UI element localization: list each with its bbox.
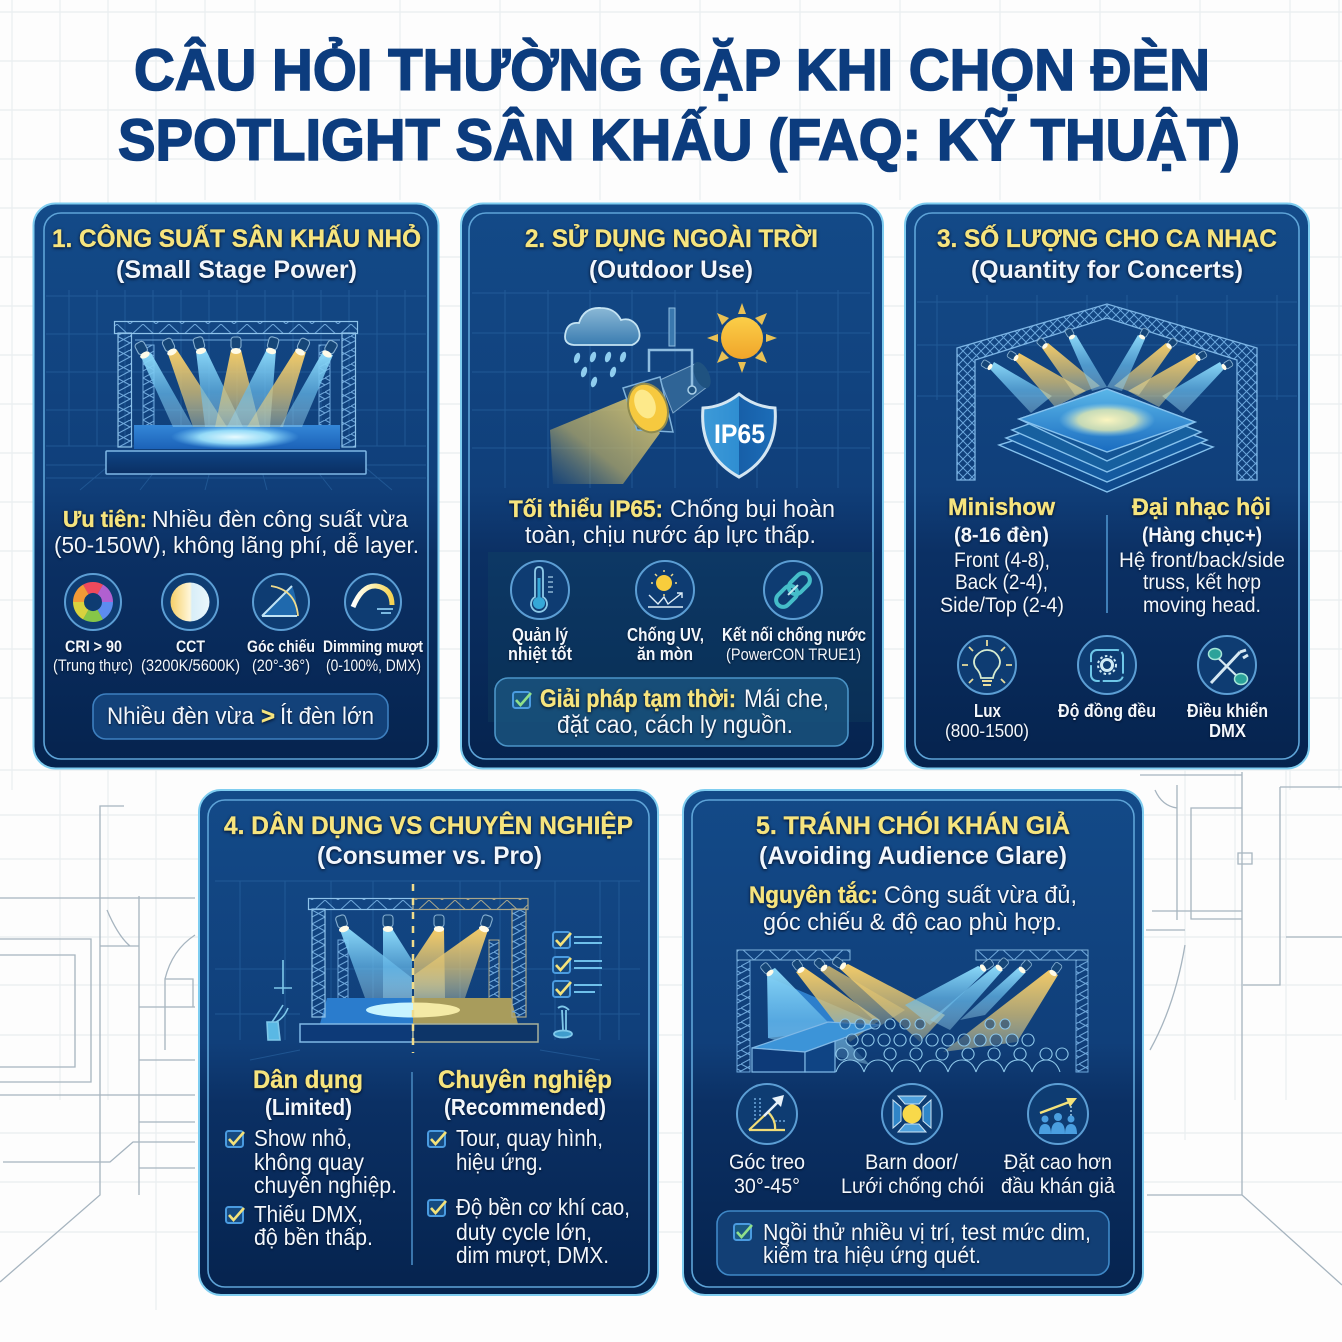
professional column: duty cycle lớn, <box>456 1219 592 1245</box>
callout: test tip: kiểm tra hiệu ứng quét. <box>763 1242 981 1268</box>
consumer column <box>226 1066 397 1250</box>
feature labels: Lưới chống chói <box>841 1175 984 1198</box>
stepped stage <box>999 389 1213 492</box>
feature labels: Kết nối chống nước <box>722 625 866 645</box>
panel: 4 consumer vs pro <box>199 790 658 1295</box>
feature labels: DMX <box>1209 721 1246 741</box>
panel 1 heading <box>52 223 421 284</box>
title <box>118 38 1240 173</box>
feature labels: (20°-36°) <box>252 656 310 675</box>
icon: rain cloud <box>565 308 640 388</box>
icon: waterproof connector <box>764 561 822 619</box>
festival column: truss, kết hợp <box>1143 571 1261 594</box>
minishow column: (8-16 đèn) <box>954 524 1049 547</box>
light beam <box>550 397 660 484</box>
icon: weak stand <box>267 960 292 1040</box>
panel: 2 outdoor use <box>461 204 883 768</box>
IP65 requirement text <box>509 496 835 549</box>
icon: hanging angle <box>737 1084 797 1144</box>
priority text: Ưu tiên: <box>63 506 147 532</box>
icon: thermometer <box>511 561 569 619</box>
centre dashed divider <box>412 884 414 1053</box>
panel 5 heading: (Avoiding Audience Glare) <box>759 842 1067 870</box>
split stage illustration <box>215 881 640 1060</box>
panel 1 heading: 1. CÔNG SUẤT SÂN KHẤU NHỎ <box>52 223 421 253</box>
audience <box>836 1019 1068 1072</box>
feature labels: Dimming mượt <box>323 637 423 656</box>
feature labels <box>53 637 423 675</box>
icon: barn door <box>882 1084 942 1144</box>
festival column: (Hàng chục+) <box>1142 524 1262 547</box>
panel: 1 small stage power <box>34 204 438 768</box>
panel 3 heading: (Quantity for Concerts) <box>971 256 1243 284</box>
IP65 requirement text: Tối thiểu IP65: <box>509 496 663 523</box>
minishow column: Front (4-8), <box>954 549 1050 572</box>
consumer column: (Limited) <box>265 1094 352 1120</box>
panel 3 heading <box>937 223 1277 284</box>
professional column: Chuyên nghiệp <box>438 1066 612 1094</box>
takeaway button: > <box>261 703 275 730</box>
professional column: hiệu ứng. <box>456 1149 543 1175</box>
takeaway button: Nhiều đèn vừa <box>107 703 255 730</box>
panel 3 heading: 3. SỐ LƯỢNG CHO CA NHẠC <box>937 223 1277 253</box>
icon: CRI colour wheel <box>65 574 121 630</box>
feature labels: Độ đồng đều <box>1058 701 1156 721</box>
panel 4 heading <box>224 810 633 870</box>
professional column <box>428 1066 630 1268</box>
panel 4 heading: (Consumer vs. Pro) <box>317 842 542 870</box>
principle text: góc chiếu & độ cao phù hợp. <box>763 909 1062 936</box>
feature labels: đầu khán giả <box>1001 1175 1115 1198</box>
minishow column: Minishow <box>948 494 1055 521</box>
feature labels <box>945 701 1268 741</box>
feature labels: Góc chiếu <box>247 637 315 656</box>
festival column <box>1119 494 1285 617</box>
priority text: (50-150W), không lãng phí, dễ layer. <box>54 532 419 558</box>
festival column: Hệ front/back/side <box>1119 549 1285 572</box>
icon: uniformity <box>1078 636 1136 694</box>
icon: DMX control tools <box>1198 636 1256 694</box>
principle text: Nguyên tắc: <box>749 881 878 909</box>
truss arch <box>957 304 1257 480</box>
consumer column: không quay <box>254 1149 364 1175</box>
icon: IP65 shield <box>703 394 775 477</box>
feature labels <box>508 625 866 664</box>
icon: beam angle <box>253 574 309 630</box>
panel 4 heading: 4. DÂN DỤNG VS CHUYÊN NGHIỆP <box>224 810 633 840</box>
takeaway button <box>93 694 388 739</box>
feature labels: (3200K/5600K) <box>141 656 240 675</box>
panel 1 heading: (Small Stage Power) <box>116 256 357 284</box>
IP65 requirement text: Chống bụi hoàn <box>670 496 835 523</box>
festival column: Đại nhạc hội <box>1132 494 1271 521</box>
feature labels: Chống UV, <box>627 625 704 645</box>
minishow column: Side/Top (2-4) <box>940 594 1064 617</box>
feature labels: 30°-45° <box>734 1175 800 1198</box>
callout: temporary solution: Mái che, <box>744 685 829 713</box>
priority text: Nhiều đèn công suất vừa <box>152 506 408 532</box>
consumer column: chuyên nghiệp. <box>254 1172 397 1198</box>
feature labels: (800-1500) <box>945 721 1029 741</box>
callout: temporary solution <box>495 678 848 746</box>
feature labels: (0-100%, DMX) <box>326 656 421 675</box>
priority text <box>54 506 419 558</box>
principle text: Công suất vừa đủ, <box>884 882 1077 909</box>
callout: temporary solution: Giải pháp tạm thời: <box>540 685 736 713</box>
minishow column: Back (2-4), <box>955 571 1048 594</box>
feature labels: Điều khiển <box>1187 701 1268 721</box>
stage screen <box>768 977 880 1038</box>
feature labels: Quản lý <box>512 625 568 645</box>
panel 2 heading: 2. SỬ DỤNG NGOÀI TRỜI <box>525 223 818 253</box>
callout: test tip <box>717 1211 1109 1275</box>
faint watermark <box>488 552 873 722</box>
IP65 requirement text: toàn, chịu nước áp lực thấp. <box>525 522 816 549</box>
feature labels: (Trung thực) <box>53 656 133 675</box>
minishow column <box>940 494 1064 617</box>
callout: temporary solution: đặt cao, cách ly nguồn. <box>557 711 793 739</box>
feature labels: Lux <box>974 701 1001 721</box>
consumer column: Dân dụng <box>253 1066 363 1094</box>
feature labels: nhiệt tốt <box>508 644 572 664</box>
panel: 5 avoiding audience glare <box>683 790 1143 1295</box>
stage block <box>752 1022 880 1072</box>
feature labels: (PowerCON TRUE1) <box>726 645 861 664</box>
title: CÂU HỎI THƯỜNG GẶP KHI CHỌN ĐÈN <box>134 38 1210 103</box>
feature labels: CCT <box>176 637 205 656</box>
icon: checklist <box>553 932 602 997</box>
panel 5 heading <box>756 810 1070 870</box>
concert stage illustration <box>917 295 1297 492</box>
title: SPOTLIGHT SÂN KHẤU (FAQ: KỸ THUẬT) <box>118 108 1240 173</box>
consumer column: độ bền thấp. <box>254 1224 373 1250</box>
icon: UV protection <box>636 561 694 619</box>
feature labels: CRI > 90 <box>65 637 122 656</box>
professional column: dim mượt, DMX. <box>456 1242 609 1268</box>
consumer column: Thiếu DMX, <box>254 1201 363 1227</box>
audience glare illustration <box>737 950 1088 1072</box>
outdoor illustration <box>472 290 870 488</box>
icon: pro stand <box>554 1006 572 1038</box>
icon: lux bulb <box>958 636 1016 694</box>
panel 2 heading <box>525 223 818 284</box>
panel: 3 quantity for concerts <box>905 204 1309 768</box>
principle text <box>749 881 1077 936</box>
feature labels: Góc treo <box>729 1151 805 1174</box>
panel 5 heading: 5. TRÁNH CHÓI KHÁN GIẢ <box>756 810 1070 840</box>
consumer column: Show nhỏ, <box>254 1125 352 1151</box>
festival column: moving head. <box>1143 594 1261 617</box>
icon: IP65 shield: IP65 <box>714 419 765 449</box>
professional column: Tour, quay hình, <box>456 1125 603 1151</box>
feature labels: Đặt cao hơn <box>1004 1151 1112 1174</box>
feature labels: ăn mòn <box>637 644 693 664</box>
feature labels <box>729 1151 1115 1198</box>
takeaway button: Ít đèn lớn <box>280 703 374 730</box>
feature labels: Barn door/ <box>865 1151 958 1174</box>
icon: spotlight <box>621 308 714 438</box>
icon: raised above audience <box>1028 1084 1088 1144</box>
panel 2 heading: (Outdoor Use) <box>589 256 753 284</box>
stage illustration <box>46 290 426 490</box>
callout: test tip: Ngồi thử nhiều vị trí, test mức dim, <box>763 1219 1091 1245</box>
icon: sun <box>707 303 777 373</box>
professional column: Độ bền cơ khí cao, <box>456 1194 630 1220</box>
icon: CCT <box>162 574 218 630</box>
professional column: (Recommended) <box>444 1094 606 1120</box>
icon: dimming <box>345 574 401 630</box>
